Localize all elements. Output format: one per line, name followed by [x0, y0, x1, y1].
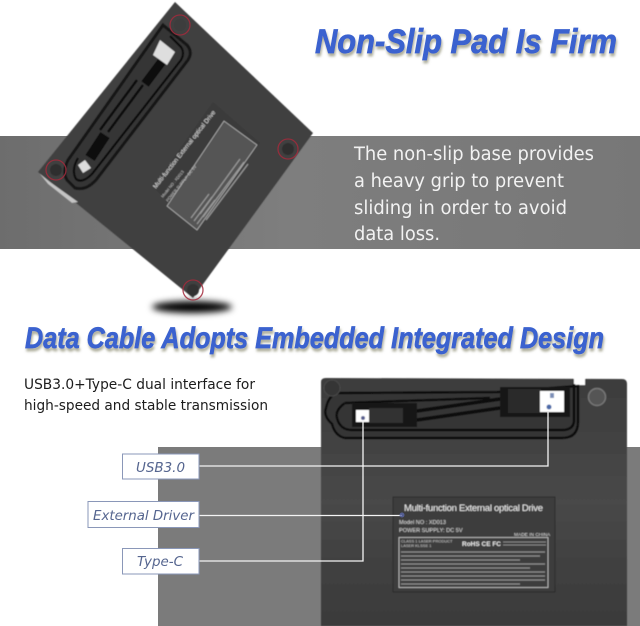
type-C plug — [369, 408, 403, 423]
text block: non-slip description: a heavy grip to prevent — [354, 171, 564, 192]
product label: LASER KLSSE 1 — [401, 543, 432, 548]
red highlight circles on feet — [46, 15, 298, 300]
callout lines — [199, 412, 548, 561]
product label: CLASS 1 LASER PRODUCT — [401, 538, 453, 544]
text block: non-slip description: sliding in order to avoid — [354, 198, 567, 219]
product label: MADE IN CHINA — [514, 532, 551, 538]
text block: dual interface: USB3.0+Type-C dual interface for — [24, 377, 255, 393]
USB plug and type-C plug — [145, 60, 163, 84]
callout label: USB3.0 — [122, 454, 199, 479]
USB plug — [508, 389, 541, 413]
rubber feet — [174, 19, 186, 31]
rotated product label: Multi-function External optical Drive — [152, 109, 218, 190]
cable recess — [325, 386, 578, 438]
text block: non-slip description — [353, 144, 594, 245]
callout label: USB3.0: USB3.0 — [136, 460, 185, 476]
callout anchor dot — [400, 512, 404, 518]
rotated product label — [152, 102, 260, 230]
drop shadow under drive — [152, 301, 232, 313]
photo: rotated optical drive underside — [38, 2, 313, 298]
gray band: top section — [0, 136, 640, 249]
product label: RoHS CE FC — [462, 541, 501, 548]
callout label: External Driver: External Driver — [93, 508, 195, 524]
callout label: Type-C — [122, 548, 199, 574]
rotated product label: Model NO : XD013 — [160, 169, 185, 199]
cable recess — [65, 25, 190, 189]
text block: non-slip description: The non-slip base provides — [353, 144, 594, 165]
photo: drive top view — [321, 376, 627, 626]
product label — [393, 497, 555, 592]
rotated product label: POWER SUPPLY: DC 5V — [165, 164, 198, 203]
feet — [324, 380, 340, 396]
product label: Model NO : XD013 — [399, 520, 446, 526]
callout label: Type-C: Type-C — [137, 554, 184, 570]
product label: Multi-function External optical Drive — [404, 503, 543, 514]
text block: dual interface — [24, 377, 268, 414]
heading: non-slip pad: Non-Slip Pad Is Firm — [315, 23, 617, 61]
product label: POWER SUPPLY: DC 5V — [399, 528, 463, 534]
gray panel: bottom section — [158, 447, 640, 626]
text block: non-slip description: data loss. — [354, 224, 440, 245]
text block: dual interface: high-speed and stable transmission — [24, 398, 268, 414]
callout label: External Driver — [88, 502, 199, 528]
